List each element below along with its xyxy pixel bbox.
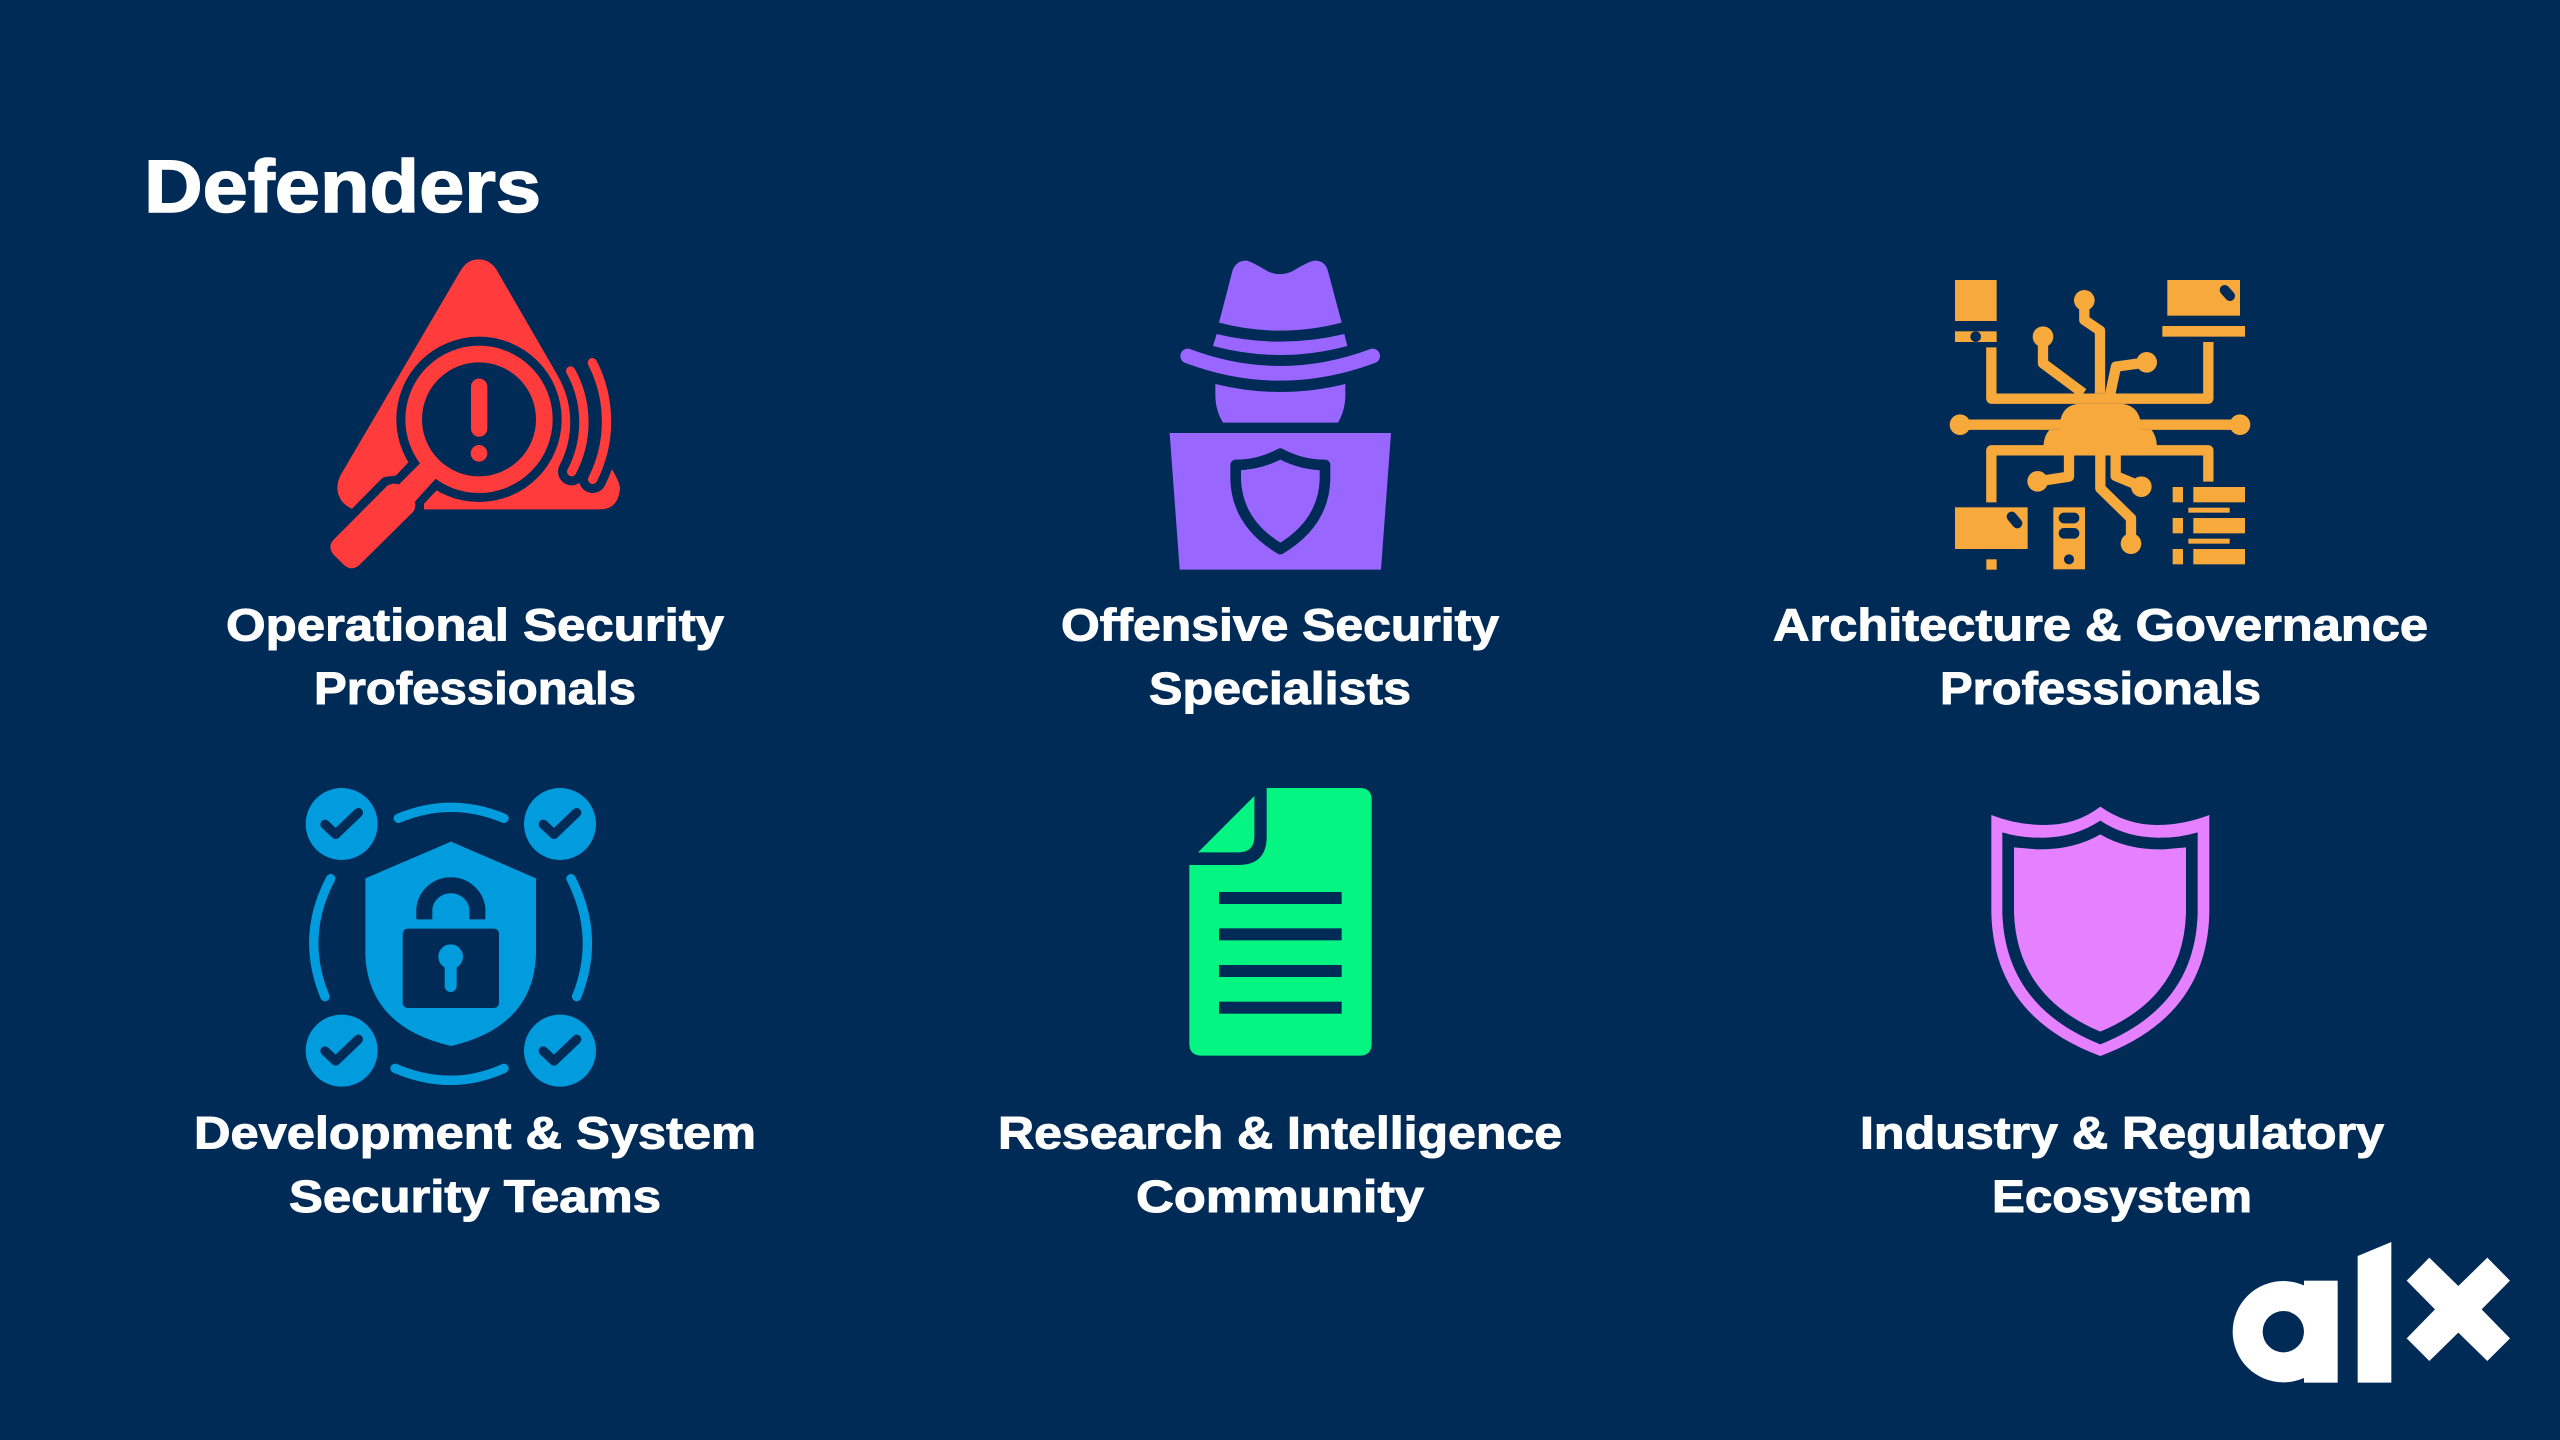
panel: Research & Intelligence Community xyxy=(998,788,1562,1222)
panel: Operational Security Professionals xyxy=(226,259,724,714)
icon: warning triangle with magnifier xyxy=(330,259,620,568)
label: Community xyxy=(1136,1171,1424,1222)
title: Defenders xyxy=(144,145,541,228)
label: Architecture & Governance xyxy=(1773,600,2428,650)
label xyxy=(1860,1108,2384,1222)
label: Industry & Regulatory xyxy=(1860,1108,2384,1158)
icon: document xyxy=(1189,788,1372,1056)
panel: Offensive Security Specialists xyxy=(1061,261,1499,714)
icon: shield with padlock and checks xyxy=(306,788,596,1087)
label xyxy=(998,1108,1562,1222)
icon: cloud circuit network xyxy=(1950,280,2250,570)
label: Operational Security xyxy=(226,600,724,650)
label xyxy=(226,600,724,714)
label: Offensive Security xyxy=(1061,600,1499,650)
label: Professionals xyxy=(1940,663,2261,714)
label xyxy=(1773,600,2428,714)
label: Research & Intelligence xyxy=(998,1108,1562,1158)
panel: Industry & Regulatory Ecosystem xyxy=(1860,807,2384,1222)
label: Ecosystem xyxy=(1992,1171,2252,1222)
icon: hooded hacker with hat and shield xyxy=(1170,261,1391,569)
label: Professionals xyxy=(314,663,636,714)
logo: alx xyxy=(2233,1242,2510,1383)
icon: shield xyxy=(1991,807,2209,1056)
panel: Architecture & Governance Professionals xyxy=(1773,280,2428,714)
panel: Development & System Security Teams xyxy=(194,788,756,1222)
label: Development & System xyxy=(194,1108,756,1158)
label xyxy=(194,1108,756,1222)
label xyxy=(1061,600,1499,714)
label: Security Teams xyxy=(289,1171,661,1222)
label: Specialists xyxy=(1149,663,1411,714)
